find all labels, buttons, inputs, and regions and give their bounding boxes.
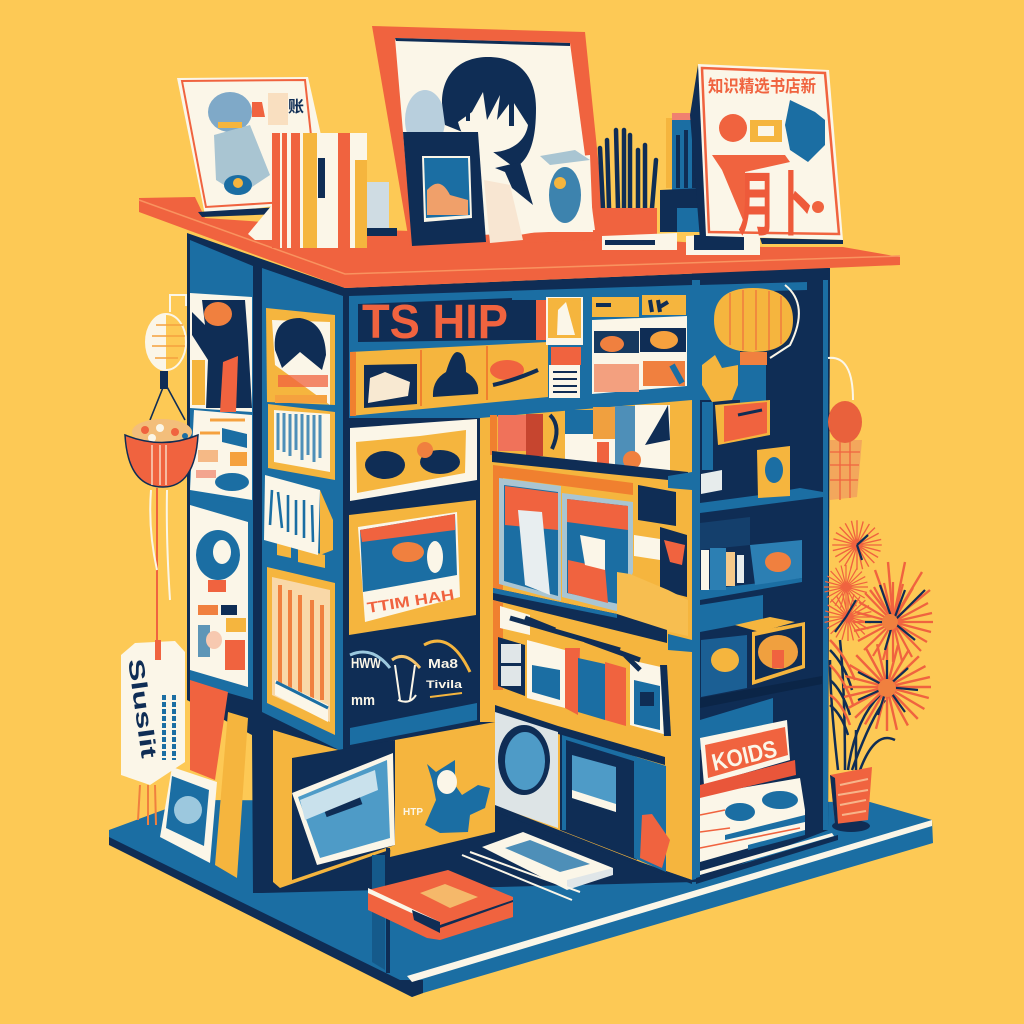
photo frame [160, 767, 217, 863]
three yellow boxes [350, 342, 548, 416]
dark chalk poster: Tivila [426, 679, 463, 691]
navy rays [835, 535, 925, 715]
stems and leaves [830, 640, 895, 770]
shelf bar one [492, 451, 688, 486]
side cards [638, 485, 676, 526]
small navy frame [403, 132, 486, 246]
top right frame: 知识精选书店新 [708, 76, 816, 96]
red box [368, 870, 513, 940]
yellow lantern [714, 285, 799, 365]
dark chalk poster: Ma8 [428, 656, 458, 671]
white tag: Sluslit [123, 657, 162, 761]
paper lantern [146, 295, 186, 370]
lower left panels [160, 680, 248, 878]
small poster column [546, 297, 583, 398]
ornament and boxes [701, 355, 790, 498]
panel: middle side posters [262, 268, 343, 752]
hanging decor left [121, 295, 198, 825]
pole [372, 848, 390, 973]
white tag [121, 640, 185, 825]
washing machine [495, 705, 692, 884]
poster: black hair [266, 308, 335, 405]
framed posters [499, 478, 633, 612]
upper fan of big flower [870, 562, 930, 620]
poster: portrait [190, 492, 248, 687]
wide art poster [350, 419, 477, 501]
cat poster lower [390, 722, 495, 857]
shelf bar two [493, 588, 667, 643]
shelf 1 [700, 488, 823, 513]
top right frame: 月卜 [738, 166, 813, 244]
dark chalk poster: HWW [351, 655, 382, 672]
top left frame [177, 77, 321, 217]
stack of magazines: KOIDS [709, 736, 780, 777]
top shelf posters [490, 405, 670, 473]
bay three appliances [493, 600, 671, 736]
panel: inner display bay [480, 400, 692, 884]
photo grid [592, 295, 687, 394]
structure back frame [187, 233, 830, 893]
strings [156, 488, 158, 645]
shelf 3 [700, 676, 822, 708]
dark chalk poster: mm [351, 692, 375, 709]
plant [824, 520, 933, 832]
poster: scribble [268, 404, 335, 480]
panel: front upper grid [345, 285, 692, 752]
poster: lettering [264, 475, 333, 568]
red panel [190, 680, 228, 780]
bay two [493, 465, 688, 636]
roof [139, 197, 900, 288]
pen holders [596, 113, 760, 255]
lower band of panel [350, 703, 477, 745]
stacked books on floor [462, 832, 613, 900]
cat poster lower: HTP [403, 807, 423, 818]
poster sliver [484, 180, 523, 243]
top center frame [372, 26, 605, 247]
panel: left side posters [190, 240, 253, 700]
books on roof [248, 133, 397, 248]
right column [692, 268, 838, 884]
poster: orange art [267, 567, 335, 735]
hanging bowl [125, 371, 198, 487]
poster: figure [190, 293, 252, 412]
pot [830, 767, 872, 832]
shelf three items [701, 617, 805, 697]
small dark book [512, 300, 548, 340]
poster: small chart [190, 410, 252, 500]
shelf two items [701, 540, 802, 590]
dark cabinet [560, 733, 637, 860]
stack of magazines [700, 720, 805, 862]
shelf 2 [700, 578, 802, 600]
character [442, 57, 537, 240]
top right frame [690, 64, 843, 244]
poster on yellow [349, 500, 476, 635]
base shelf [696, 833, 838, 884]
panel: lower left cabinet with photo [273, 730, 395, 888]
basket right [828, 358, 862, 500]
poster on yellow: TTIM HAH [366, 586, 456, 617]
dark chalk poster [350, 641, 470, 709]
floor platform [109, 800, 933, 997]
sign: TS HIP: TS HIP [362, 296, 508, 349]
narrow blue poster [634, 756, 670, 872]
flower bursts [843, 643, 931, 731]
yellow panel [215, 712, 248, 878]
top left frame: 账 [288, 98, 304, 116]
